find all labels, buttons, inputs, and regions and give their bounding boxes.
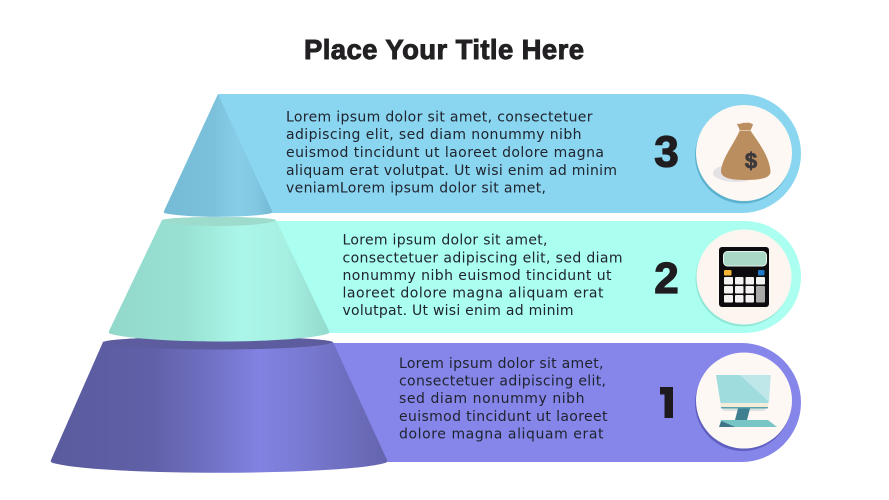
- text: level 2 description: [342, 233, 622, 319]
- number 3: 3: [654, 128, 679, 176]
- text: level 2 description: laoreet dolore magna aliquam erat: [342, 285, 604, 301]
- text: level 3 description: Lorem ipsum dolor sit amet, consectetuer: [286, 109, 593, 125]
- panel: level 2 band: [270, 221, 801, 333]
- number 2: 2: [654, 254, 679, 303]
- text: level 2 description: nonummy nibh euismod tincidunt ut: [342, 268, 612, 284]
- text: level 1 description: [399, 356, 608, 442]
- icon: desktop computer: [695, 352, 792, 451]
- text: level 1 description: sed diam nonummy nibh: [399, 391, 584, 407]
- text: level 2 description: Lorem ipsum dolor sit amet,: [342, 233, 548, 249]
- panel: level 1 band: [330, 343, 801, 462]
- title: Place Your Title Here: [304, 34, 584, 65]
- pyramid: middle section: [109, 217, 329, 342]
- text: level 1 description: consectetuer adipiscing elit,: [399, 374, 606, 390]
- icon: money bag: [695, 105, 792, 204]
- panel: level 3 band: [218, 94, 801, 213]
- icon: money bag: $: [745, 148, 757, 174]
- top face of bottom section: [103, 337, 333, 350]
- text: level 3 description: aliquam erat volutpat. Ut wisi enim ad minim: [286, 163, 617, 179]
- text: level 1 description: dolore magna aliquam erat: [399, 426, 604, 442]
- top face of middle section: [162, 217, 276, 226]
- text: level 3 description: euismod tincidunt ut laoreet dolore magna: [286, 145, 604, 161]
- text: level 2 description: consectetuer adipiscing elit, sed diam: [342, 250, 622, 266]
- text: level 1 description: euismod tincidunt ut laoreet: [399, 409, 608, 425]
- text: level 3 description: [286, 109, 617, 196]
- icon: calculator: [696, 230, 792, 326]
- text: level 3 description: adipiscing elit, sed diam nonummy nibh: [286, 127, 582, 143]
- text: level 1 description: Lorem ipsum dolor sit amet,: [399, 356, 604, 372]
- text: level 2 description: volutpat. Ut wisi enim ad minim: [342, 303, 574, 319]
- pyramid: top cone: [164, 94, 272, 217]
- pyramid: bottom section: [51, 337, 387, 473]
- text: level 3 description: veniamLorem ipsum dolor sit amet,: [286, 180, 546, 196]
- number 1: [660, 387, 673, 418]
